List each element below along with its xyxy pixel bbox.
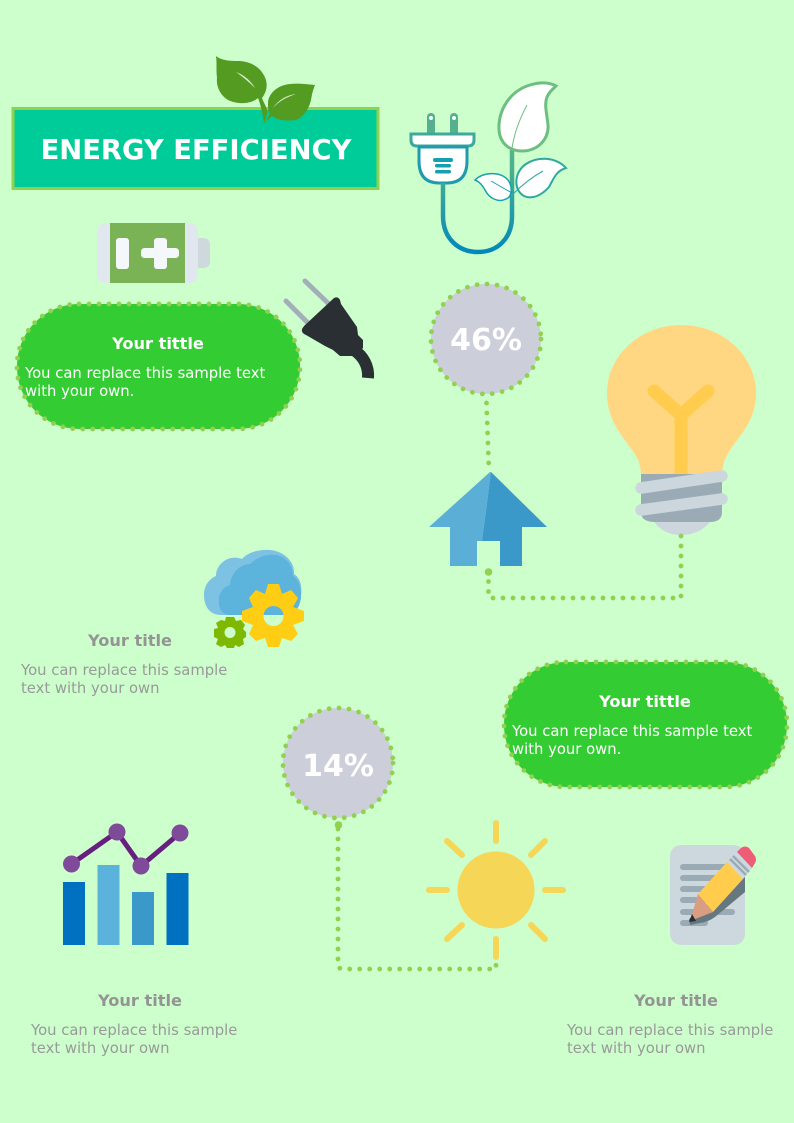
icon: light bulb: [607, 325, 756, 535]
green gear: [214, 617, 246, 648]
stat: 14%: 14%: [302, 749, 374, 784]
icon: bar chart: [63, 824, 188, 945]
text block: left title: text with your own: [21, 680, 160, 697]
icon: black plug: [286, 281, 368, 378]
text block: bottom left: text with your own: [31, 1040, 170, 1057]
arrowhead blob: [335, 821, 342, 829]
text block: bottom right: text with your own: [567, 1040, 706, 1057]
bars: [63, 865, 188, 945]
text block: left title: You can replace this sample: [20, 662, 227, 679]
text block: left title: [20, 631, 227, 697]
text block: [511, 723, 752, 758]
icon: plug with leaves: [411, 83, 566, 252]
right small leaf: [516, 159, 566, 197]
plug body: [419, 147, 467, 183]
text block: bottom left: [30, 991, 237, 1057]
icon: cloud with gears: [204, 550, 304, 648]
text block: with your own.: [512, 741, 621, 758]
arrowhead blob: [485, 568, 492, 576]
left small leaf: [475, 174, 511, 200]
icon: sun: [429, 823, 563, 957]
stat: 14%: [283, 708, 393, 818]
icon: battery: [97, 223, 210, 283]
panel: green pill right: [504, 662, 787, 787]
line: [63, 824, 188, 874]
cloud: [204, 550, 301, 615]
icon: green leaves: [216, 56, 315, 124]
panel: green pill top: [17, 304, 300, 429]
heading: Your tittle: [598, 692, 691, 711]
big leaf: [499, 83, 556, 151]
text block: left title: Your title: [87, 631, 172, 650]
plug slots: [433, 158, 453, 174]
text block: bottom right: You can replace this sample: [566, 1022, 773, 1039]
title: ENERGY EFFICIENCY: [41, 135, 353, 166]
plug head: [411, 134, 474, 146]
text block: with your own.: [25, 383, 134, 400]
stat: 46%: [431, 284, 541, 394]
text block: bottom right: [566, 991, 773, 1057]
text block: bottom left: Your title: [97, 991, 182, 1010]
title banner: [13, 108, 378, 188]
text block: bottom right: Your title: [633, 991, 718, 1010]
heading: Your tittle: [111, 334, 204, 353]
text block: [24, 365, 265, 400]
cord: [443, 150, 512, 252]
connector: 14% to sun: [335, 821, 496, 969]
text block: You can replace this sample text: [511, 723, 752, 740]
connector: bulb to house: [485, 536, 681, 598]
text block: bottom left: You can replace this sample: [30, 1022, 237, 1039]
icon: notepad and pencil: [670, 845, 756, 945]
stat: 46%: 46%: [450, 323, 522, 358]
plug prongs: [427, 113, 458, 137]
connector: 46% to house: [486, 403, 489, 472]
yellow gear: [242, 584, 304, 647]
icon: house: [429, 472, 547, 566]
text block: You can replace this sample text: [24, 365, 265, 382]
